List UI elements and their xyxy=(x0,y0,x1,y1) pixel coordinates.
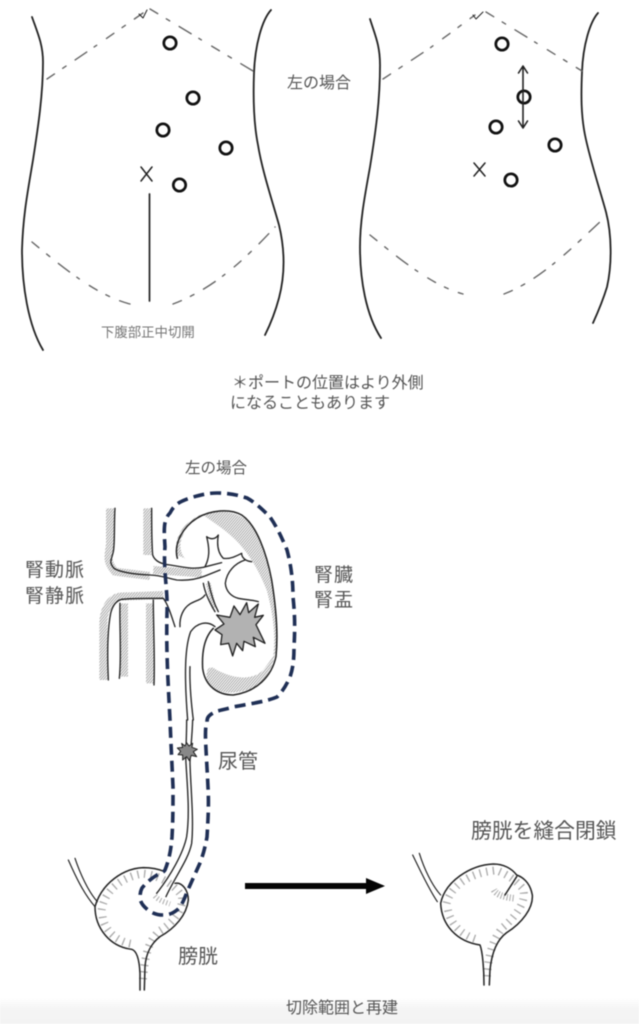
midline incision xyxy=(148,194,150,301)
left side ureter xyxy=(68,858,97,907)
bladder outline xyxy=(441,864,532,985)
excision range dashed outline xyxy=(140,493,295,915)
kidney and vessels xyxy=(103,508,277,720)
label: incision: 下腹部正中切開 xyxy=(101,324,195,340)
caption: 切除範囲と再建 xyxy=(286,999,398,1017)
bladder outline xyxy=(95,868,188,990)
note text: になることもあります xyxy=(230,394,390,412)
bladder hatching xyxy=(447,870,524,980)
label: bladder closure: 膀胱を縫合閉鎖 xyxy=(471,820,617,843)
double arrow xyxy=(518,66,528,128)
label: bladder: 膀胱 xyxy=(178,945,218,968)
kidney outline xyxy=(176,511,277,695)
label: kidney and pelvis: 腎盂 xyxy=(314,589,354,611)
label: renal artery and vein: 腎動脈 xyxy=(25,559,85,581)
left torso diagram xyxy=(22,9,284,350)
label: left side case: 左の場合 xyxy=(287,74,351,92)
ureter top xyxy=(185,623,215,720)
camera port mark xyxy=(474,163,485,176)
tumour star xyxy=(215,603,265,656)
left side ureter xyxy=(413,853,441,902)
ureter small tumour xyxy=(177,743,197,761)
camera port mark xyxy=(141,167,152,181)
port circles xyxy=(490,38,561,186)
note text xyxy=(230,374,424,412)
right torso diagram xyxy=(360,12,611,338)
repaired bladder xyxy=(413,853,532,985)
bladder hatching xyxy=(102,874,182,983)
label: kidney and pelvis: 腎臓 xyxy=(314,564,354,586)
port circles xyxy=(157,37,232,191)
ureter and bladder xyxy=(68,720,197,990)
ureter xyxy=(157,720,188,893)
footer band xyxy=(0,998,639,1024)
heading: left side case: 左の場合 xyxy=(185,459,248,477)
label: ureter: 尿管 xyxy=(218,750,258,773)
arrow xyxy=(245,878,385,894)
label: renal artery and vein: 腎静脈 xyxy=(25,585,85,607)
note text: ＊ポートの位置はより外側 xyxy=(232,374,424,392)
label: renal artery and vein xyxy=(25,559,85,607)
vessel hatching xyxy=(103,508,214,683)
suture line xyxy=(505,877,517,895)
vessels xyxy=(108,508,258,685)
kidney cortex hatching xyxy=(176,512,277,693)
label: kidney and pelvis xyxy=(314,564,354,611)
